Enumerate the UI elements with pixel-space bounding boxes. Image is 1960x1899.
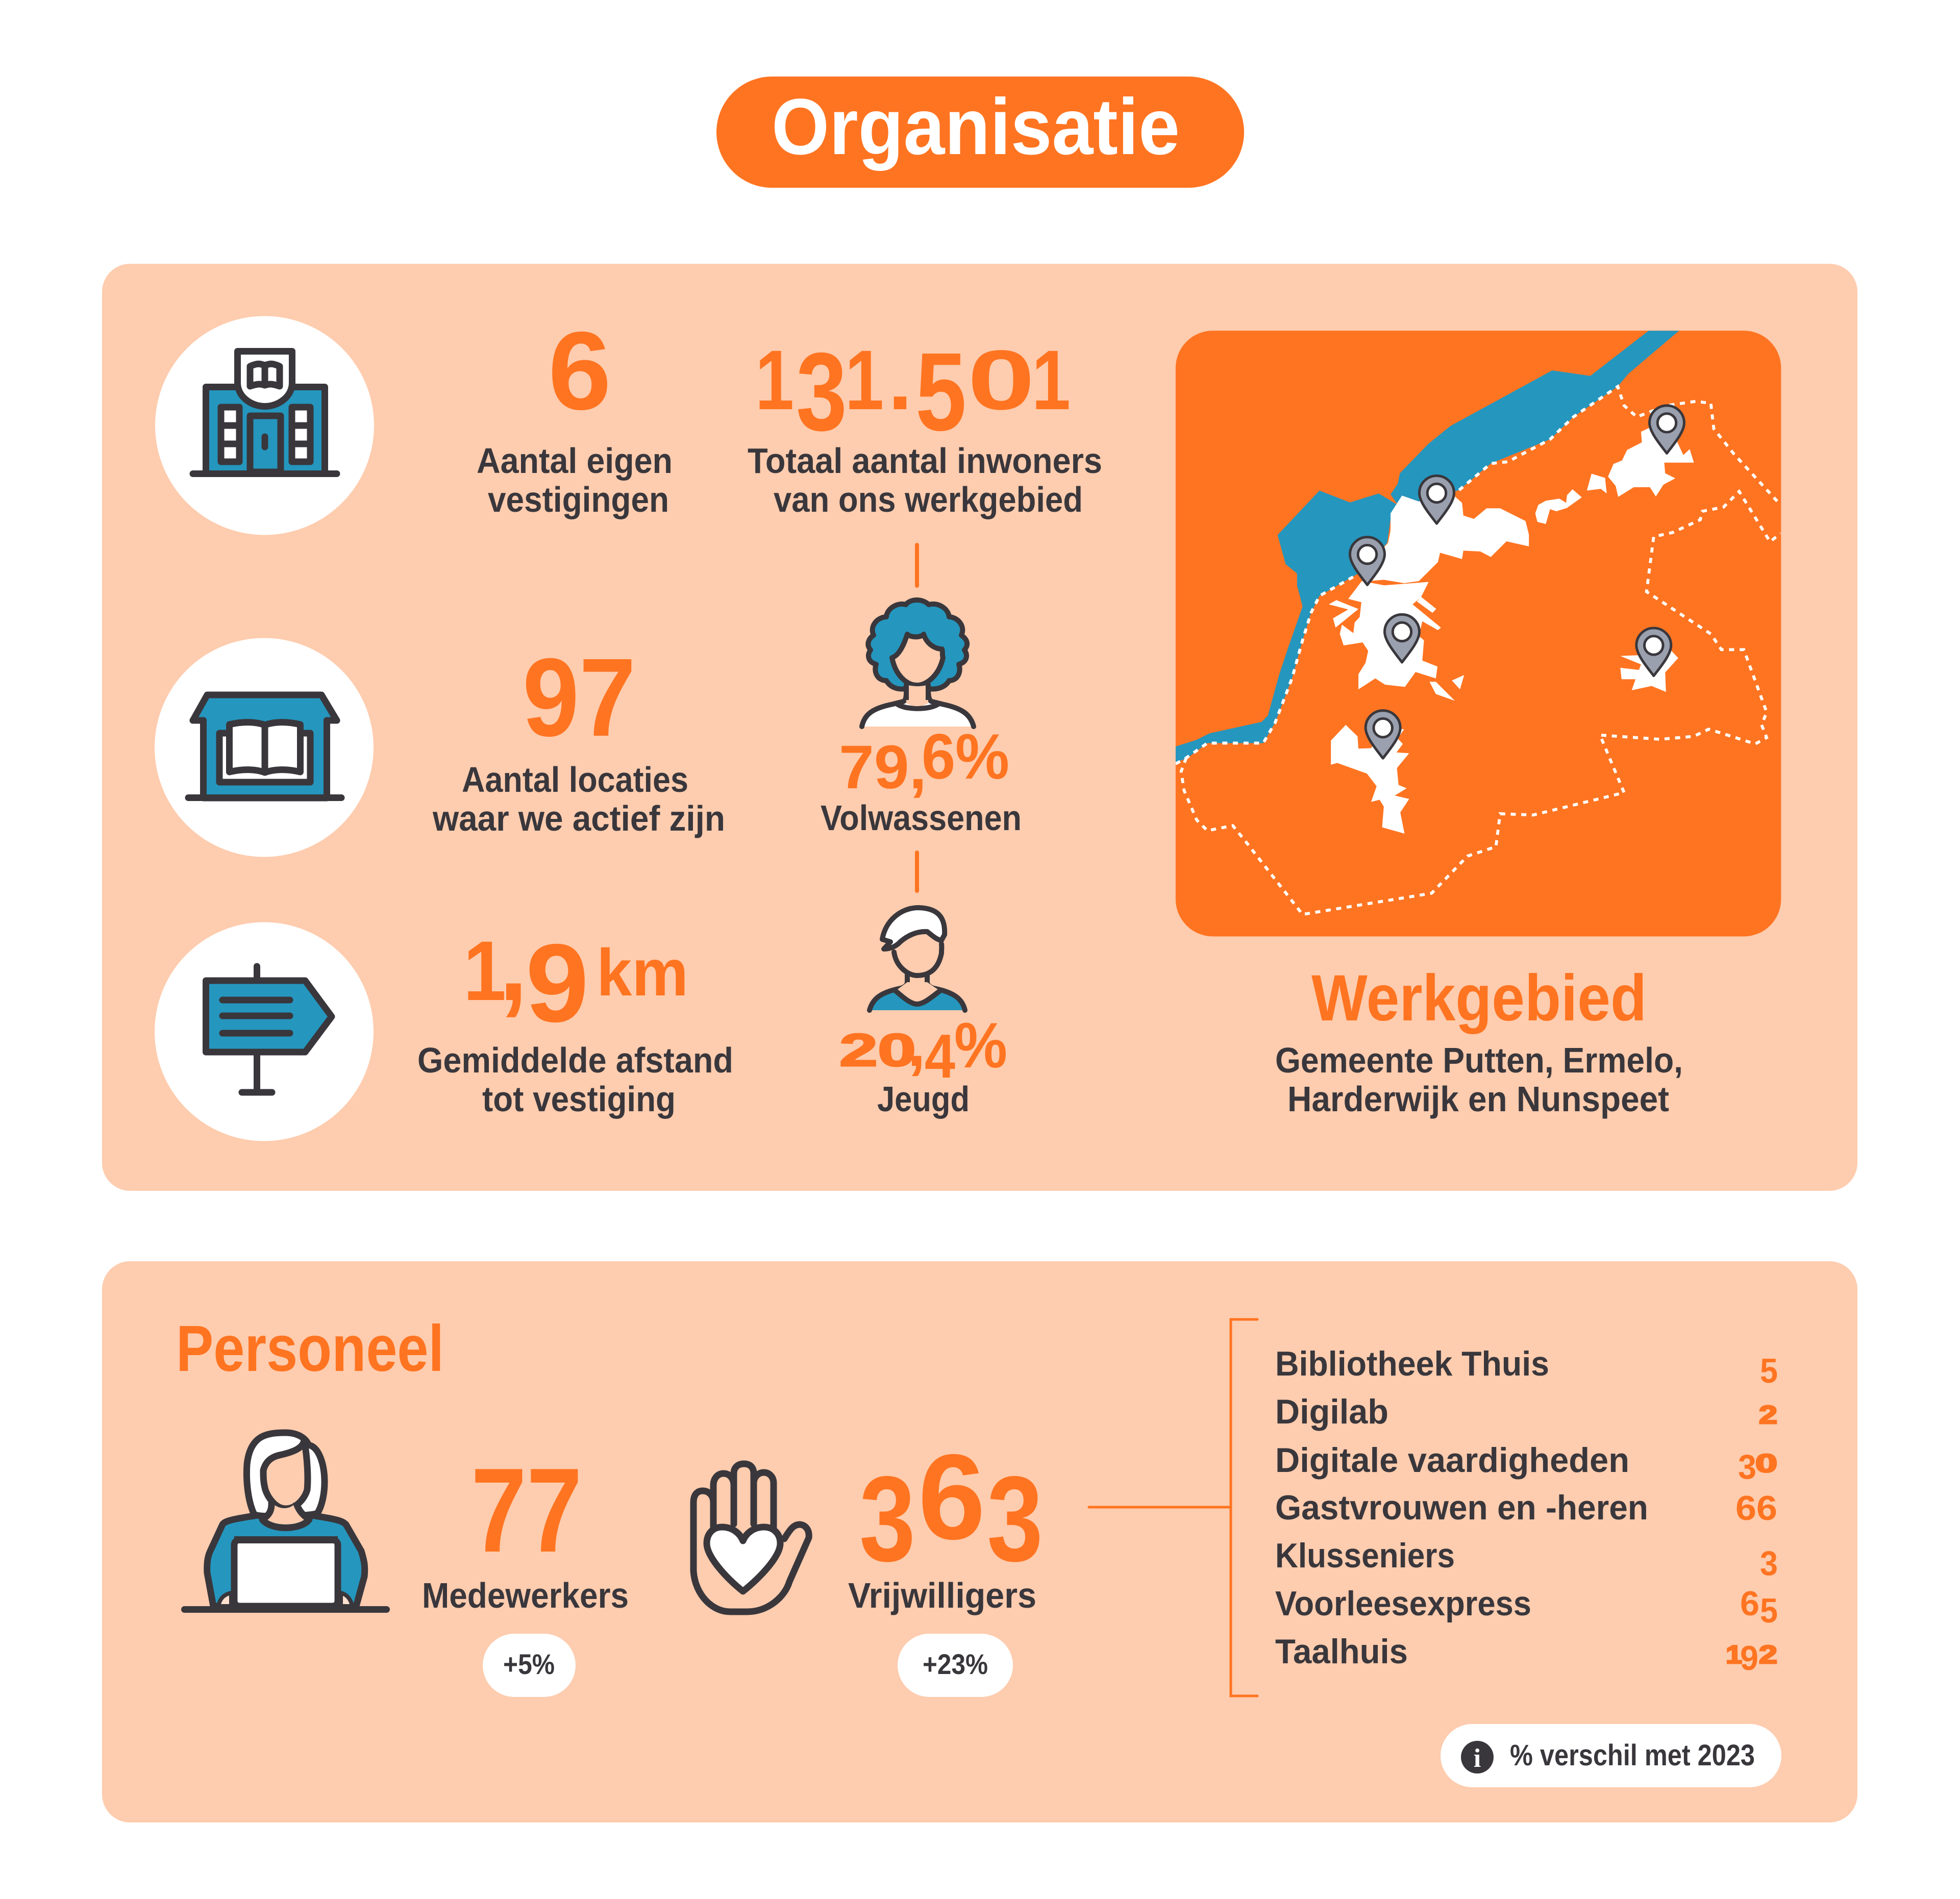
stat: aantal inwoners: Totaal aantal inwoners [748, 441, 1102, 481]
stat: gemiddelde afstand: 9 [526, 921, 589, 1045]
stat: jeugd: 20 [839, 1025, 916, 1076]
list: vrijwilligers per activiteit: 5 [1760, 1352, 1778, 1390]
panel: personeel [102, 1261, 1857, 1822]
icon: youth with short hair [870, 908, 965, 1010]
borders: gemeentegrenzen [1176, 387, 1781, 914]
stat: gemiddelde afstand: , [499, 900, 528, 1024]
water: Veluwemeer [1176, 331, 1679, 762]
badge: +23% [898, 1634, 1013, 1697]
list: vrijwilligers per activiteit: 66 [1735, 1489, 1777, 1528]
stat: gemiddelde afstand: km [597, 935, 688, 1010]
stat: aantal inwoners [748, 330, 1102, 519]
stat: eigen vestigingen: 6 [548, 309, 611, 433]
list: vrijwilligers per activiteit: 3 [1738, 1447, 1756, 1486]
stat: aantal locaties: Aantal locaties [462, 760, 688, 799]
stat: jeugd: , [907, 1006, 926, 1080]
icon: school building [155, 316, 374, 535]
stat: aantal inwoners: 3 [796, 330, 847, 454]
list: vrijwilligers per activiteit [1275, 1344, 1778, 1678]
stat: vrijwilligers: 3 [859, 1452, 915, 1587]
stat: aantal locaties: 97 [523, 636, 636, 760]
stat: volwassenen: 79, [839, 732, 927, 802]
stat: medewerkers: Medewerkers [422, 1576, 629, 1615]
stat: aantal inwoners: . [888, 333, 912, 428]
towns: bebouwde kernen [1329, 427, 1694, 834]
list: vrijwilligers per activiteit: 2 [1759, 1401, 1777, 1429]
list: vrijwilligers per activiteit: Digitale vaardigheden [1275, 1441, 1629, 1480]
list: vrijwilligers per activiteit: Gastvrouwen en -heren [1275, 1488, 1648, 1527]
map: werkgebied [1176, 331, 1781, 936]
list: vrijwilligers per activiteit: 0 [1755, 1449, 1777, 1478]
list: vrijwilligers per activiteit: 9 [1740, 1639, 1758, 1678]
icon: hand with heart [693, 1464, 809, 1612]
stat: gemiddelde afstand: tot vestiging [482, 1079, 676, 1119]
stat: medewerkers: 77 [471, 1443, 582, 1577]
list: vrijwilligers per activiteit: 1 [1726, 1640, 1742, 1669]
badge: +5% [483, 1634, 576, 1697]
list: vrijwilligers per activiteit: Voorleesexpress [1275, 1584, 1531, 1623]
stat: vrijwilligers: 3 [987, 1452, 1043, 1587]
stat: gemiddelde afstand: 1 [463, 924, 506, 1018]
stat: eigen vestigingen [477, 309, 673, 519]
stat: vrijwilligers [848, 1430, 1043, 1615]
list: vrijwilligers per activiteit: Bibliotheek Thuis [1275, 1344, 1549, 1383]
connector line: inwoners naar volwassenen [915, 545, 919, 586]
stat: vrijwilligers: 6 [918, 1430, 985, 1565]
badge: +5%: +5% [503, 1648, 555, 1680]
stat: volwassenen: Volwassenen [821, 798, 1022, 838]
icon: info: i [1474, 1744, 1481, 1773]
title [716, 77, 1244, 188]
heading: personeel: Personeel [176, 1312, 444, 1385]
stat: gemiddelde afstand [417, 900, 733, 1119]
stat: aantal inwoners: 1 [755, 333, 794, 428]
stat: jeugd: Jeugd [877, 1079, 970, 1119]
stat: aantal inwoners: van ons werkgebied [774, 480, 1083, 519]
heading: werkgebied: Harderwijk en Nunspeet [1287, 1079, 1669, 1119]
stat: jeugd: % [954, 1010, 1007, 1081]
title: Organisatie [772, 83, 1180, 171]
stat: aantal inwoners: 5 [915, 330, 966, 454]
stat: volwassenen: 6% [922, 721, 1009, 792]
stat: eigen vestigingen: Aantal eigen [477, 441, 673, 481]
heading: werkgebied: Werkgebied [1311, 962, 1647, 1035]
list: vrijwilligers per activiteit: 6 [1740, 1584, 1759, 1623]
legend: % verschil met 2023 [1441, 1724, 1781, 1787]
list: vrijwilligers per activiteit: Digilab [1275, 1392, 1388, 1431]
list: vrijwilligers per activiteit: 3 [1760, 1544, 1778, 1583]
heading: werkgebied: Gemeente Putten, Ermelo, [1275, 1040, 1683, 1080]
stat: medewerkers [422, 1443, 629, 1615]
stat: aantal inwoners: 1 [845, 333, 884, 428]
heading: werkgebied [1275, 962, 1683, 1119]
stat: jeugd [839, 1006, 1007, 1119]
stat: aantal locaties: waar we actief zijn [432, 798, 725, 838]
badge: +23%: +23% [923, 1648, 988, 1680]
icon: medewerker at laptop [181, 1433, 390, 1613]
stat: aantal inwoners: 0 [967, 333, 1035, 428]
icon: adult with curly hair [862, 600, 974, 727]
list: vrijwilligers per activiteit: 5 [1760, 1591, 1778, 1630]
panel: organisatie kerncijfers [102, 264, 1857, 1191]
stat: aantal inwoners: 1 [1032, 333, 1071, 428]
stat: jeugd: 4 [925, 1021, 955, 1091]
stat: eigen vestigingen: vestigingen [488, 480, 669, 519]
stat: volwassenen [821, 721, 1022, 838]
icon: signpost [155, 922, 374, 1141]
list: vrijwilligers per activiteit: 2 [1759, 1640, 1777, 1669]
stat: vrijwilligers: Vrijwilligers [848, 1576, 1036, 1615]
stat: gemiddelde afstand: Gemiddelde afstand [417, 1040, 733, 1080]
icon: library with book [155, 638, 374, 857]
connector: bracket to volunteers list [1089, 1319, 1257, 1696]
connector line: volwassenen naar jeugd [915, 853, 919, 891]
icon: info [1461, 1741, 1494, 1773]
pins: zes vestigingen [1350, 406, 1684, 758]
list: vrijwilligers per activiteit: Klusseniers [1275, 1536, 1455, 1575]
legend: % verschil met 2023: % verschil met 2023 [1510, 1739, 1755, 1772]
list: vrijwilligers per activiteit: Taalhuis [1275, 1632, 1408, 1671]
stat: aantal locaties [432, 636, 725, 838]
